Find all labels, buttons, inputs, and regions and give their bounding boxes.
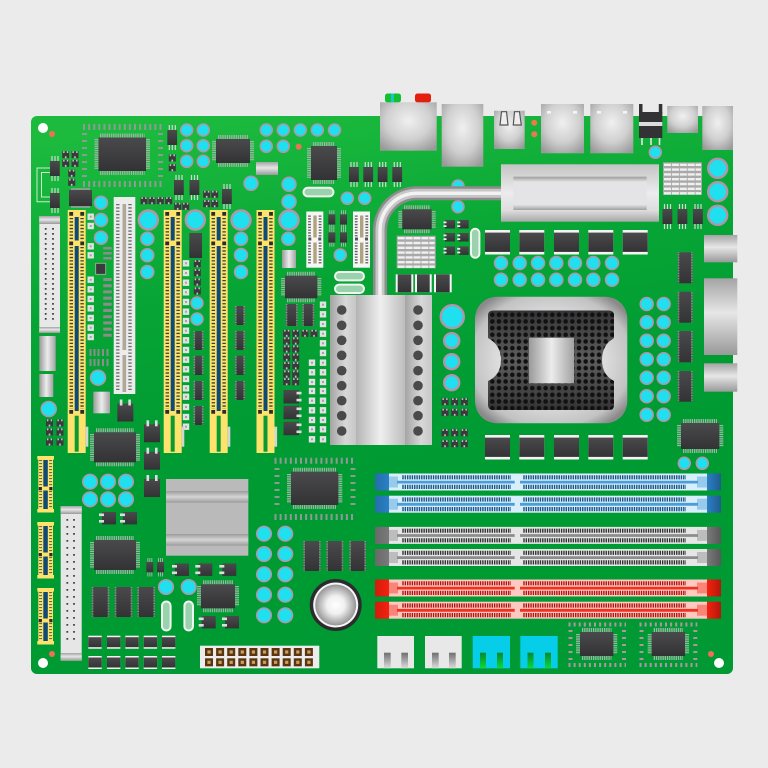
electrolytic capacitor	[310, 579, 362, 631]
white PCI slot	[114, 197, 135, 394]
central QFP chip with pin ring	[274, 461, 356, 517]
tall port	[442, 104, 483, 167]
HDMI style port two	[590, 104, 633, 153]
silver cylinders	[39, 162, 296, 413]
small tall port	[702, 106, 733, 150]
CPU socket	[475, 297, 627, 423]
black resistors row	[396, 274, 452, 292]
small IC chips with pins	[92, 137, 721, 610]
socket frame	[475, 297, 627, 423]
memory slots	[375, 474, 721, 619]
rear IO connectors	[380, 94, 737, 392]
VRM power inductors	[485, 230, 648, 460]
tall SOP chips	[92, 233, 693, 617]
socket pin field	[488, 310, 614, 410]
white comb connectors	[306, 212, 370, 268]
eight pin chips row	[328, 162, 703, 247]
side port large	[704, 278, 737, 355]
crystal oscillators	[162, 188, 479, 631]
bottom left inductors	[88, 636, 175, 669]
trace outline	[37, 168, 50, 202]
circuit board	[31, 116, 733, 674]
bottom right chips with pin rings	[568, 624, 697, 665]
central heat sink	[330, 295, 432, 445]
small left chips	[46, 125, 468, 447]
small square port	[667, 106, 698, 133]
yellow PCI slots	[68, 210, 277, 453]
heat grids	[397, 162, 702, 268]
red DIMM slots	[375, 580, 721, 619]
large silver connector housing	[501, 164, 659, 222]
small left pin transistors	[444, 220, 469, 255]
ATX power connector	[200, 646, 319, 668]
USB port	[494, 111, 525, 149]
blue DIMM slots	[375, 474, 721, 513]
socket holes	[488, 310, 614, 410]
side port top	[704, 235, 737, 262]
socket center block	[529, 338, 574, 383]
audio jack block with LEDs	[380, 94, 437, 151]
lower left yellow connectors	[37, 456, 54, 644]
left ribbon connector	[39, 216, 60, 333]
lower left ribbon connector	[61, 506, 82, 661]
small black regulators	[99, 390, 302, 628]
HDMI style port one	[541, 104, 584, 153]
white fan headers	[377, 636, 462, 668]
capacitor field	[41, 124, 727, 623]
side port bottom	[704, 363, 737, 392]
upper left controller chip with pin ring	[83, 127, 163, 184]
mounting holes and marker dots	[38, 120, 724, 668]
chipset heat sink	[166, 479, 248, 556]
white resistor pads	[88, 214, 326, 442]
black header	[639, 104, 662, 145]
small chip by slot one	[69, 188, 92, 208]
silver heat pipe	[380, 193, 502, 297]
resistor stacks	[90, 247, 108, 366]
grey DIMM slots	[375, 527, 721, 566]
cyan fan headers	[473, 636, 558, 668]
